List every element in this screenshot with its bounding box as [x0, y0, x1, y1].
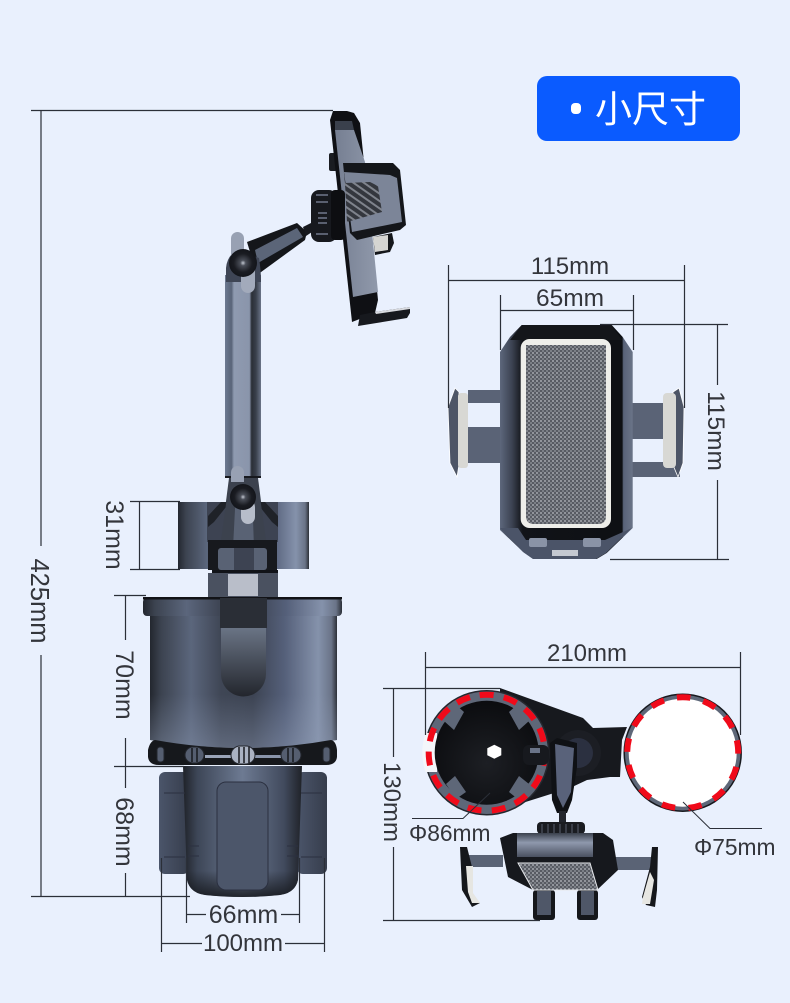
base: large cup body — [143, 597, 342, 748]
front view: phone holder — [448, 325, 684, 559]
dimension lines: front view — [448, 265, 729, 560]
label: diameter 86mm: Φ86mm — [409, 820, 491, 846]
holder body — [500, 325, 633, 559]
title badge: 小尺寸 — [595, 89, 706, 130]
top view: mount — [422, 688, 744, 920]
white frame — [521, 339, 611, 528]
label: 70mm: 70mm — [110, 650, 138, 720]
dimension lines: top view — [383, 652, 762, 921]
label: 66mm: 66mm — [209, 901, 278, 929]
top view: link plate — [500, 688, 627, 810]
holder lower — [500, 528, 632, 559]
top view: large holder ring — [422, 691, 549, 815]
title badge — [537, 76, 740, 141]
top view: phone holder — [460, 822, 658, 920]
top view: ball knob and arm — [523, 730, 601, 823]
label: 210mm: 210mm — [547, 640, 627, 667]
label: 115mm height: 115mm — [702, 391, 729, 471]
dotted panel — [526, 345, 606, 524]
lower ball joint — [230, 484, 256, 510]
red dashed diameter: large ring — [422, 688, 551, 817]
holder top band — [510, 325, 622, 340]
side view: upper arm — [247, 223, 307, 275]
bottom tabs — [529, 538, 601, 556]
label: 65mm: 65mm — [536, 285, 604, 312]
top view: small holder ring — [624, 694, 741, 811]
base: connector block — [208, 573, 278, 598]
base: adjustment ring — [148, 740, 337, 765]
label: 31mm: 31mm — [100, 500, 128, 570]
left clamp — [448, 388, 468, 477]
ring knobs — [157, 746, 330, 764]
label: 100mm: 100mm — [203, 930, 283, 957]
side view: telescopic column — [225, 275, 261, 477]
red dashed diameter: small ring — [622, 692, 744, 814]
base: upper cup ring — [178, 482, 309, 573]
label: diameter 75mm: Φ75mm — [694, 834, 776, 860]
label: 68mm: 68mm — [110, 797, 138, 867]
side view: full mount — [220, 111, 410, 548]
clamp arms — [468, 390, 680, 477]
side view: upper joint — [226, 232, 261, 293]
base: lower body with side blocks — [159, 766, 327, 897]
label: 425mm: 425mm — [25, 558, 53, 644]
side view: phone cradle — [329, 111, 410, 326]
side view: lower joint — [220, 466, 267, 548]
side view: ratchet knob — [303, 190, 345, 242]
dimension lines: side view — [31, 110, 333, 952]
label: 115mm width: 115mm — [531, 253, 609, 280]
label: 130mm: 130mm — [378, 762, 405, 842]
right clamp — [663, 388, 684, 477]
